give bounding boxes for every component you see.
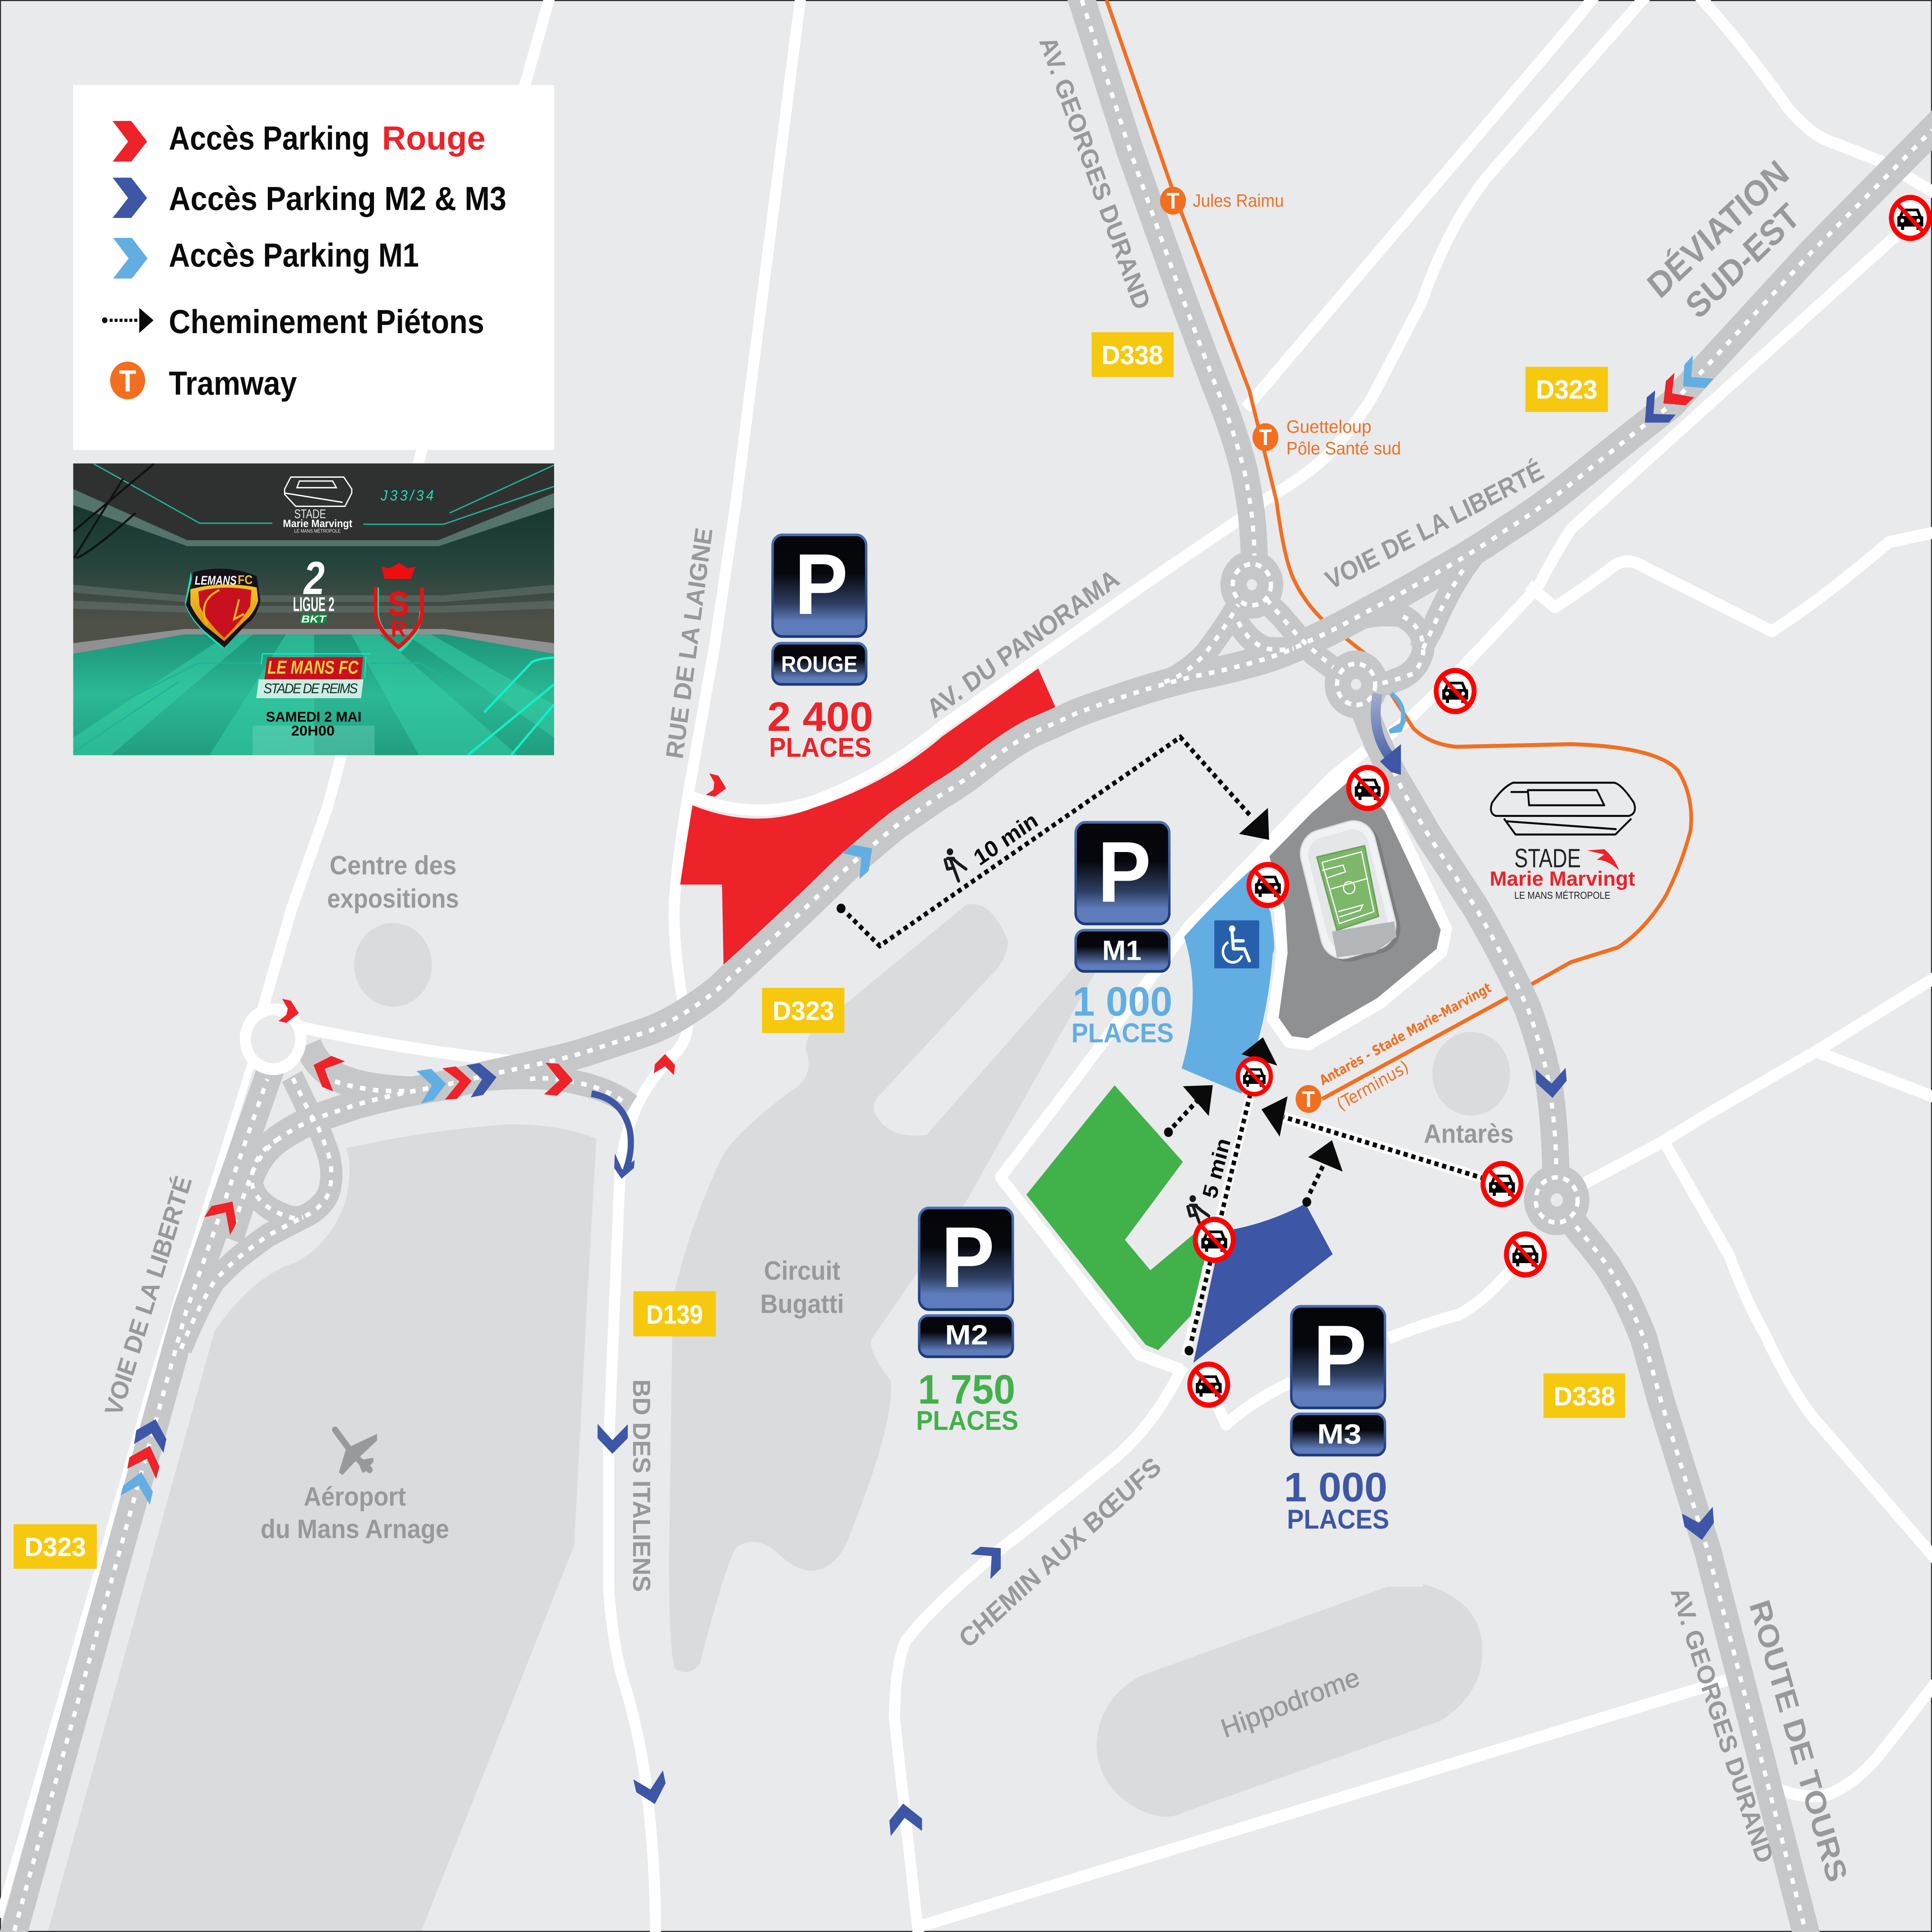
goal	[253, 726, 374, 755]
tram stop Antarès terminus: T	[1302, 1087, 1315, 1112]
arrow head	[1308, 1140, 1343, 1172]
stadium logo	[283, 477, 352, 534]
road label: Déviation: DÉVIATION	[1640, 152, 1796, 306]
road label: Voie de la Liberté east: VOIE DE LA LIBERTÉ	[1321, 456, 1548, 595]
stand	[1332, 922, 1396, 957]
round number: J33/34	[380, 487, 434, 503]
turn arrow to D139	[592, 1094, 634, 1179]
crest: Stade de Reims: S	[388, 584, 409, 623]
road label: Bd des Italiens: BD DES ITALIENS	[628, 1379, 655, 1592]
road label: Chemin aux Boeufs: CHEMIN AUX BŒUFS	[954, 1452, 1167, 1654]
parking badge M3	[1291, 1306, 1385, 1455]
parking badge M2	[919, 1208, 1013, 1357]
legend: Rouge: Rouge	[382, 119, 485, 157]
stands	[73, 505, 554, 643]
parking badge M1: P	[1098, 824, 1151, 920]
pitch	[73, 634, 554, 755]
legend: walking route: Cheminement Piétons	[169, 303, 484, 340]
west roundabout	[245, 1009, 301, 1069]
parking badge Rouge: P	[794, 536, 848, 633]
tram stop Jules Raimu: Jules Raimu	[1193, 190, 1284, 211]
tram stop Antarès terminus: (Terminus)	[1334, 1057, 1412, 1115]
area: circuit Bugatti	[669, 904, 1100, 1672]
roof edge	[73, 489, 554, 546]
road label: Sud-Est: SUD-EST	[1679, 196, 1807, 326]
parking capacity M2: PLACES	[916, 1405, 1019, 1436]
barrier	[73, 629, 554, 654]
parking badge M3: P	[1313, 1307, 1367, 1404]
parking capacity M2: 1 750	[918, 1366, 1015, 1413]
legend: tramway	[110, 362, 297, 402]
tram stop Jules Raimu: T	[1167, 188, 1179, 213]
crest: Stade de Reims: R	[391, 616, 406, 641]
walking route Antarès	[1262, 1096, 1485, 1179]
crest: Le Mans FC: FC	[238, 572, 253, 587]
area: centre des expositions	[354, 923, 432, 1007]
road numbers: D323	[772, 996, 834, 1026]
place label: Aéroport du Mans Arnage: du Mans Arnage	[260, 1515, 449, 1544]
legend: Rouge	[112, 119, 485, 162]
road label: Voie de la Liberté west: VOIE DE LA LIBERTÉ	[99, 1172, 197, 1419]
icon: accessibility	[1214, 920, 1259, 968]
area: hippodrome	[1097, 1584, 1482, 1816]
dark streaks	[73, 464, 154, 558]
Stade Marie Marvingt logo: STADE	[1514, 844, 1581, 873]
parking capacity M3: 1 000	[1284, 1464, 1388, 1510]
road numbers: D338	[1554, 1382, 1615, 1411]
arrow head	[1239, 808, 1269, 840]
road label: Route de Tours: ROUTE DE TOURS	[1743, 1596, 1854, 1886]
walking time 5 min: 5 min	[1198, 1135, 1235, 1201]
parking M1 area	[1182, 870, 1274, 1094]
tram stop Guetteloup: T	[1259, 425, 1272, 450]
match title: LE MANS FC	[267, 657, 359, 678]
walking route M3	[1303, 1140, 1343, 1207]
crest: Stade de Reims	[376, 563, 422, 650]
stadium logo: STADE	[294, 507, 326, 521]
walking route casing	[1185, 1079, 1485, 1355]
crest: Le Mans FC: LEMANS	[195, 573, 236, 587]
road label: Av. Georges Durand north: AV. GEORGES DURAND	[1034, 32, 1156, 313]
legend: tramway: T	[119, 364, 136, 398]
stadium	[1296, 815, 1406, 968]
road numbers	[14, 332, 1625, 1569]
tram stop Guetteloup: Guetteloup	[1286, 417, 1371, 437]
place label: Hippodrome: Hippodrome	[1217, 1662, 1363, 1744]
parking capacity M1	[1071, 978, 1173, 1048]
arrow head	[1183, 1085, 1213, 1116]
parking M3 area	[1193, 1204, 1333, 1363]
parking badge Rouge: ROUGE	[781, 651, 857, 677]
logo: Ligue 2 BKT	[293, 552, 334, 625]
road label: Rue de la Laigne: RUE DE LA LAIGNE	[661, 526, 718, 760]
parking capacity Rouge	[767, 694, 873, 763]
place label: Aéroport du Mans Arnage	[260, 1430, 449, 1544]
place label: Antarès: Antarès	[1424, 1119, 1514, 1149]
match title: STADE DE REIMS	[264, 681, 358, 696]
tram line	[1107, 0, 1691, 1099]
road numbers: D338	[1102, 340, 1163, 370]
logo: Ligue 2 BKT: LIGUE 2	[293, 593, 334, 616]
walking time 10 min	[945, 807, 1042, 881]
tram stop Guetteloup	[1252, 417, 1401, 459]
legend: M2 M3: Accès Parking M2 & M3	[169, 180, 507, 217]
swoosh	[1587, 849, 1619, 871]
parking badge M2: M2	[945, 1319, 988, 1350]
access chevrons	[121, 355, 1714, 1836]
legend: tramway: Tramway	[169, 365, 297, 402]
bright corner strokes	[468, 658, 554, 755]
legend panel	[73, 85, 554, 450]
stadium logo: LE MANS MÉTROPOLE	[294, 528, 340, 534]
logo: Ligue 2 BKT: 2	[303, 552, 325, 604]
turn arrow light blue	[1389, 694, 1407, 733]
arrow head	[1242, 1037, 1277, 1066]
place label: Circuit Bugatti: Circuit	[764, 1256, 840, 1286]
walking route M2 to M1	[1164, 1085, 1213, 1137]
area: Antarès	[1432, 1032, 1510, 1116]
Stade Marie Marvingt logo: LE MANS MÉTROPOLE	[1514, 889, 1611, 901]
road numbers: D323	[24, 1532, 86, 1562]
icon: plane	[335, 1430, 377, 1475]
no-car signs	[1190, 197, 1929, 1405]
parking capacity M3	[1284, 1464, 1389, 1535]
area: airport grounds	[48, 1124, 596, 1931]
teal lines	[73, 464, 554, 752]
turn arrow dark blue	[1376, 694, 1401, 775]
parking Rouge area	[680, 668, 1056, 983]
walking time 10 min: 10 min	[969, 807, 1042, 870]
parking capacity Rouge: PLACES	[769, 732, 871, 763]
parking M2 area	[1026, 1085, 1220, 1350]
legend: Rouge: Accès Parking	[169, 119, 370, 157]
parking capacity M3: PLACES	[1287, 1504, 1389, 1535]
tram stop Jules Raimu	[1160, 187, 1284, 214]
Stade Marie Marvingt logo: Marie Marvingt	[1490, 867, 1635, 890]
road label: Av. Georges Durand south: AV. GEORGES DURAND	[1665, 1583, 1779, 1867]
match banner	[73, 463, 554, 755]
road numbers: D323	[1536, 375, 1597, 405]
match date	[266, 709, 362, 739]
match date: SAMEDI 2 MAI	[266, 709, 362, 725]
stadium grounds	[1263, 769, 1447, 1044]
walking route 5 min	[1185, 1037, 1277, 1355]
place label: Aéroport du Mans Arnage: Aéroport	[304, 1482, 406, 1512]
Stade Marie Marvingt logo	[1490, 783, 1635, 901]
pitch	[1317, 846, 1379, 930]
parking badge Rouge	[772, 535, 866, 684]
parking capacity M1: PLACES	[1071, 1018, 1173, 1048]
logo: Ligue 2 BKT: BKT	[301, 614, 327, 625]
match title	[256, 654, 371, 698]
match date: 20H00	[291, 723, 335, 739]
stadium logo: Marie Marvingt	[283, 517, 352, 529]
parking badge M1: M1	[1102, 935, 1141, 966]
place label: Centre des expositions: expositions	[327, 884, 459, 913]
place label: Circuit Bugatti: Bugatti	[760, 1289, 844, 1319]
parking capacity M1: 1 000	[1073, 978, 1172, 1024]
parking badge M3: M3	[1317, 1418, 1362, 1450]
place label: Centre des expositions	[327, 851, 459, 913]
place label: Centre des expositions: Centre des	[330, 851, 456, 880]
crest: Le Mans FC	[185, 569, 260, 648]
tram stop Antarès terminus: Antarès - Stade Marie-Marvingt	[1317, 980, 1494, 1089]
place label: Circuit Bugatti	[760, 1256, 844, 1319]
parking capacity M2	[916, 1366, 1019, 1436]
road label: Av. du Panorama: AV. DU PANORAMA	[922, 563, 1124, 724]
walking route 10 min	[837, 737, 1269, 946]
tram stop Guetteloup: Pôle Santé sud	[1286, 439, 1401, 459]
legend: M1: Accès Parking M1	[169, 236, 419, 274]
tram stop Antarès terminus	[1296, 980, 1494, 1115]
parking capacity Rouge: 2 400	[767, 694, 873, 740]
walking time 5 min	[1188, 1135, 1235, 1228]
parking badge M2: P	[941, 1209, 995, 1305]
parking badge M1	[1076, 822, 1169, 971]
road numbers: D139	[646, 1300, 703, 1330]
arrow head	[1262, 1096, 1287, 1136]
